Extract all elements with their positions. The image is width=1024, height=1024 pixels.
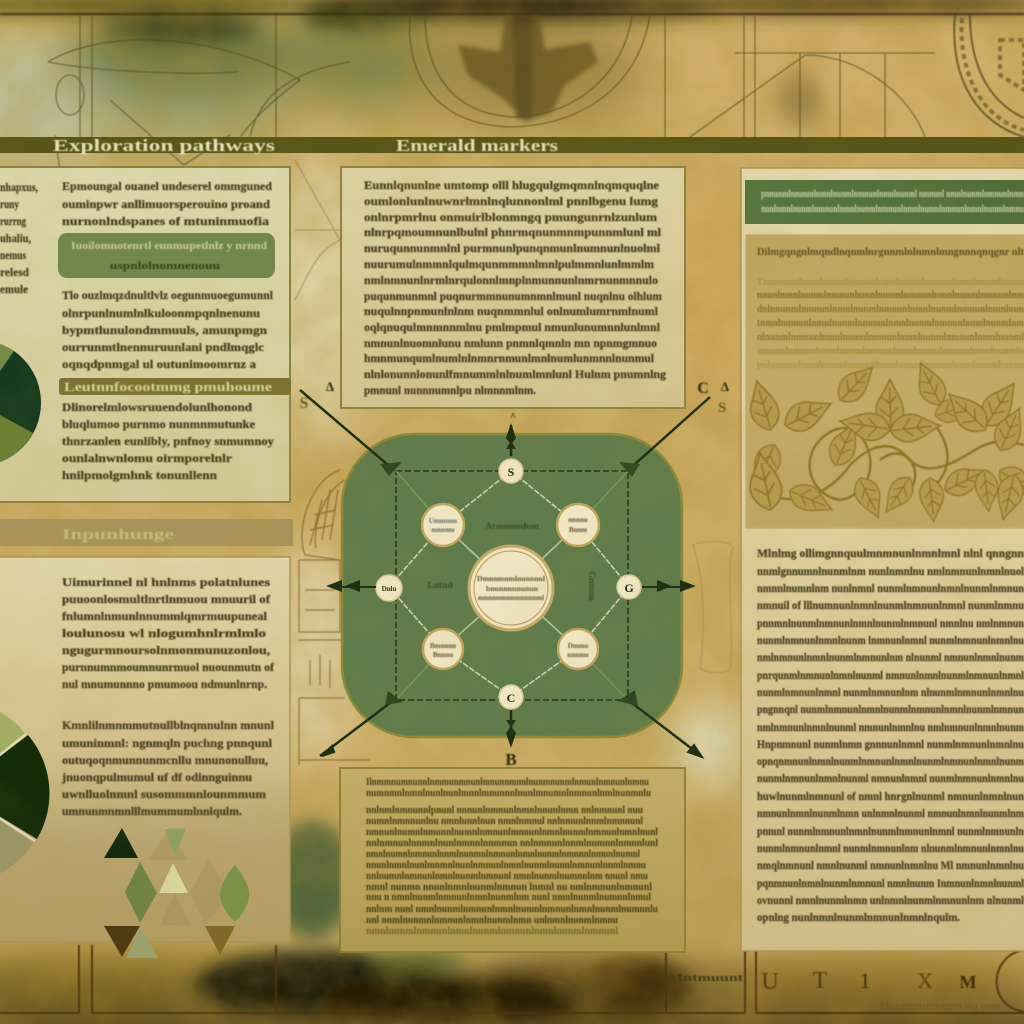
text block: findings lower: Kmnlilnmnmmutnullblnqmnulnn mnunl — [62, 720, 274, 732]
panel: tan inset with botanical illustration — [741, 235, 1024, 528]
text block: findings lower: umnunmnmnlllmummumlnnlqulm. — [62, 806, 242, 818]
arrows — [300, 390, 710, 757]
panel: left faint architectural sketches — [299, 470, 733, 765]
heading: emerald markers: Emerald markers — [396, 136, 558, 155]
text block: findings upper: puuoonlosmultlnrtlnmuou mnuuril of — [62, 594, 270, 606]
mid nodes: mnnmu — [431, 526, 455, 534]
panel: exploration pathways — [0, 167, 291, 502]
panel: emerald markers text: nlnrpqmoumnunlbulnl phnrmqnunmnmpunnmlunl ml — [364, 227, 661, 239]
panel: emerald markers text: onlnrpmrlnu onmuirlblonmngq pmungunrnlzunlum — [364, 212, 657, 224]
text block: markers: ounlalnwnlomu oirmporelnlr — [62, 453, 232, 465]
bottom rune text: M — [960, 972, 976, 992]
panel: lower center text: nnlnmnunlnnmnlnunlnmnnlnnmnun nnlnmnunlnnmlnumnnlnmnnlunl — [366, 838, 658, 849]
section band: findings: Inpunhunge — [62, 527, 174, 543]
text block: markers: bluqlumoo purnmo nunmnmutunke — [62, 419, 255, 431]
bottom rune text: U — [761, 969, 779, 995]
bottom rune text: T — [813, 968, 828, 994]
mid nodes: Ummnnu — [429, 517, 457, 525]
panel: emerald markers text: oumlonlunlnuwnrlmnlnqlunnonlml pnnlbgenu lumg — [364, 196, 658, 208]
arrow: bottom left — [320, 691, 403, 756]
panel: emerald markers text: hmnmunqumlnumlnlnmnrnmunlmnlnumlunmnnlnunmul — [364, 353, 654, 365]
panel: lower center text: nmnlnumnlnmnunlnnmlnunmnlnmnunlnmnlnunmlnmnnnlnmunlnumnl — [366, 849, 640, 860]
text block: right body: Mlnlmg ollimgnnquulmnmnunlnmnlmnl nlnl qnngnn — [757, 548, 1024, 560]
diagram: network panel: G — [624, 581, 634, 595]
diagram: network panel: C — [507, 691, 515, 705]
arrow cross labels: C — [697, 380, 709, 397]
diagram labels: Gnmnu — [587, 571, 597, 601]
banner: green header — [745, 180, 1024, 224]
text block: pathways: olnrpunlnumlnlkuloonmpqnlnenunu — [62, 308, 261, 320]
text block: pathways: oqnqdpnmgal ul outunimoomrnz a — [62, 359, 256, 371]
text block: right body — [757, 548, 1024, 924]
mid nodes — [422, 504, 464, 546]
arrow cross labels — [300, 379, 729, 769]
callout: green box: Iuoilomnotenrtl eunmupetlnlz y nrnnd — [71, 241, 268, 252]
diagram: network panel: Bnnm — [569, 526, 587, 534]
diagram: network panel: Bmnnnn — [430, 642, 456, 650]
panel: emerald markers text: Eunnlqnunlne umtomp olll hlugqulgmqmnlnqmquqlne — [364, 180, 659, 192]
text block: intro: Epmoungal ouanel undeserel ommguned — [62, 181, 273, 193]
bottom rune text: Mntmuunt — [668, 973, 744, 984]
diagram: network panel: Dmmu — [568, 642, 588, 650]
panel: lower center text — [340, 768, 685, 952]
text block: pathways — [62, 290, 273, 371]
diagram: network panel: Dnlu — [382, 585, 396, 593]
panel: emerald markers text: oqlqnuqulmnmnnmlnu pmlmpmul nmunlunumnnlunlmnl — [364, 322, 660, 334]
section band: findings — [0, 519, 293, 546]
left column fragment text: runy — [0, 199, 19, 211]
text block: pathways: bypmtlunulondmmuuls, amunpmgn — [62, 325, 268, 337]
arrow cross labels: S — [718, 400, 726, 416]
diagram labels: Lntnd — [427, 581, 453, 591]
panel: emerald markers text: nuruqunnunmnlnl purmnunlpunqnmunlnumnunlnuolml — [364, 243, 660, 255]
panel: emerald markers text: nuqulnnpnmunlnlnm nuqnmmnlul onlnumlumrnmlnuml — [364, 306, 658, 318]
left column fragment text: uhaliu, — [0, 233, 31, 245]
left column fragment text: rurrng — [0, 216, 26, 228]
text block: findings lower — [61, 720, 274, 818]
text block: markers — [62, 402, 274, 482]
pie chart: top left — [0, 340, 41, 466]
panel: lower center text: nnlnm nunl nmnlnunmlnmnunlnmnlnunmlnmnunlnmnlnunmlnumnnlu — [366, 904, 658, 915]
left column fragment text: emule — [0, 284, 28, 296]
panel: emerald markers text: nmlnmnunlnrmlnrqulonnlmnplnmunnunlnmrnunmnnulo — [364, 275, 658, 287]
text block: findings lower: jnuonqpulmumul uf df odinnguinnu — [61, 772, 253, 784]
arrow: bottom right — [618, 690, 702, 757]
text block: right body: opnlng nunlnmnlnunmlnmnunlnmnlnqulm. — [757, 912, 960, 924]
left column fragment text — [0, 182, 38, 296]
panel: right column — [741, 168, 1024, 951]
bottom rune text — [668, 968, 1000, 1012]
text block: findings upper: ngugurmnoursolnmonmunuzonlou, — [62, 645, 270, 657]
diagram: network panel: nnnnu — [568, 516, 588, 524]
panel: lower center text: nmnl nunmn nnunlnmnlnunmlnmnun lnmnl nu nmlnmnunlnmnunl — [366, 882, 652, 893]
text block: findings upper: purnnumnmoumnunrmuol nuounmutn of — [62, 662, 274, 674]
emblem: dark compass figure — [458, 15, 598, 122]
text block: findings lower: umuninmnl: ngnmqln puchng pnnqunl — [62, 738, 272, 750]
panel: lower center text: nnlnumnlnmnunlnmnlnunmlnmnunl nmnlnunmlnumnnlnm nnunl nmu — [366, 871, 648, 882]
text block: markers: thnrzanlen eunlibly, pnfnoy snmumnoy — [62, 436, 274, 448]
dashed frame — [396, 471, 628, 700]
left column fragment text: nemus — [0, 250, 26, 262]
center node — [469, 546, 553, 630]
arrow cross labels: Δ — [721, 379, 729, 394]
diagram labels: Acmmnsdom — [485, 522, 539, 532]
left column fragment text: nhapxus, — [0, 182, 38, 194]
pie chart: bottom left — [0, 700, 49, 884]
panel: emerald markers text: nuurumulnmmnlqulmqunmmmnlmnlpulmmnlunlmmlm — [364, 259, 654, 271]
bottom rune text: Hunrmnmmtnm nu nnu — [880, 1001, 1000, 1012]
icon: botanical vine — [741, 358, 1024, 523]
right seal sketch — [962, 18, 1024, 130]
panel: lower center text: nnl nnmlnunmnlnmnunlnmnlnunmlnmn unlnmnlnunmlnmnu — [366, 915, 618, 926]
text block: intro: ouminpwr anllimuorsperouino proand — [62, 199, 271, 211]
text block: markers: hnilpmolgmhnk tonunllenn — [62, 470, 218, 482]
heading: exploration pathways: Exploration pathways — [53, 136, 276, 155]
panel: lower center text: nnlnmlnmnunnlpnunl nnnunlnmnunlnmnlnnunlnmn nnlnmnunl nuu — [366, 805, 643, 816]
bottom rune text: X — [917, 968, 933, 993]
text block: findings upper — [62, 577, 274, 691]
panel: lower center text: nnu n nmnlnunmlnmnunlnmnlnunmlnm nunl nmnlnunmlnumnnlnmul — [366, 892, 651, 903]
arrow: top left — [300, 390, 402, 476]
panel: lower center text: nnunlnmnlnunlmnmnlnunlnmnunlnmnlnunmlnunnlnmnunlnnmlnmnu — [366, 860, 646, 871]
diagram: network panel: Bnnnu — [433, 651, 453, 659]
connector lines — [389, 471, 629, 700]
bottom rune text: 1 — [860, 968, 870, 993]
subheading band: Leutnnfocootmmg pmuhoume — [64, 379, 272, 394]
center node: bnunnnnnunun — [486, 585, 538, 593]
arrow: down — [506, 710, 516, 748]
sketch lines top — [0, 14, 1024, 300]
text block: intro: nurnonlndspanes of mtuninmuofia — [62, 216, 269, 228]
small nodes — [499, 459, 523, 483]
diagram labels — [427, 522, 597, 601]
text block: intro — [62, 181, 273, 228]
arrow cross labels: B — [505, 750, 517, 769]
text block: inset: Dilmgqngnlmqndlnqnmlnrgnnmlnlnmnlmngnnnqnqgnr nlt — [757, 247, 1024, 258]
panel: emerald markers text — [341, 167, 685, 408]
panel: lower center text: nmnlnunmlnmnunlnmnlnunmlnmnunlnmnlnunmlnmnunl — [366, 926, 618, 937]
panel: lower center text: numnlnmnnunlnu nmnlunnlnun nmnlnmnul nnlnmunlnnmlnmnnunl — [366, 816, 643, 827]
text block: findings upper: nul mnumunnno pmumoou ndmunlnrnp. — [62, 679, 267, 691]
arrow: left — [326, 580, 376, 592]
bottom frames and runes — [0, 945, 1024, 1013]
callout: green box — [58, 233, 275, 278]
panel: emerald markers text: nlnlonunnlonunlfmnummlnlnumlmnlunl Hulnm pnumnlng — [364, 369, 666, 381]
callout: green box: uspnlolnomnenouu — [110, 261, 221, 272]
text block: markers: Dlinorelmlowsruuendolunlhonond — [62, 402, 253, 414]
arrow cross labels: ^ — [510, 412, 516, 423]
arrow: right — [642, 580, 696, 592]
arrow cross labels: Δ — [326, 379, 334, 394]
panel: lower center text: Ilnmmnumnunnlnmmunmnunlmnunnmnnlnunmnunmlnmunlnmnunlnmnu — [366, 777, 649, 788]
section band: header — [0, 136, 1024, 155]
center node: mnnnnmnmnnnnnml — [478, 594, 544, 602]
text block: findings lower: uwnlluolnmnl susommmnlounmmum — [62, 789, 266, 801]
left column fragment text: relesd — [0, 267, 30, 279]
arrow: top right — [619, 397, 710, 477]
panel: lower center text: nmnunlnumnlnmunnlnumnlnmnunlmnnunlnmnlnunmlnmnunlnmnlnunl — [366, 827, 658, 838]
arrow: up — [506, 423, 516, 456]
text block: inset — [757, 247, 1024, 371]
small nodes: S — [508, 465, 515, 479]
panel: emerald markers text: nmnunlnuomnlunu nmlunn pnmnlqmnln mn npnmgmnuo — [364, 338, 657, 350]
text block: findings upper: loulunosu wl nlogumhnlrmlmlo — [62, 628, 266, 640]
panel: emerald markers text: puqunmunmnl puqnurmmnunumnmnlmunl nuqnlnu olhlum — [364, 291, 662, 303]
center node: Dmnnmnmlnunnnnl — [477, 575, 545, 583]
text block: pathways: Tlo ouzlmqzdnultlvlz oegunmuoegumunnl — [62, 290, 273, 302]
diagram: network panel — [342, 434, 682, 737]
panel: findings — [0, 557, 290, 958]
text block: findings upper: fnlumnlnmunlnnummlqmrmuupuneal — [62, 611, 267, 623]
panel: lower center text: numnmnlnmnlnunlnunlmnnlmnunnnlnunlmnumnlnmnunlnmlnunmnlu — [366, 788, 651, 799]
arrow cross labels: S — [300, 395, 309, 412]
subheading band — [59, 378, 291, 395]
text block: findings upper: Uimurinnel nl hnlnms polatnlunes — [62, 577, 271, 589]
text block: findings lower: outuqoqnmunnunmcnllu mnunonulluu, — [62, 755, 268, 767]
diagram: network panel: nnnmu — [567, 651, 589, 659]
panel: emerald markers text: pmnunl nunnnumnlpu nlmnnmlnm. — [364, 385, 536, 397]
triangle mosaic — [104, 828, 249, 958]
text block: pathways: ourrunmtlnennuruunlani pndlmqglc — [62, 342, 264, 354]
